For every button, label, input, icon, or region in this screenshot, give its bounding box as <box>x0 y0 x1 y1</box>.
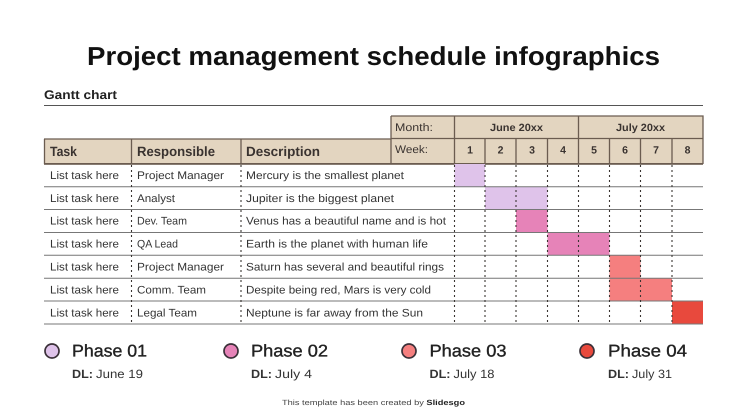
table header: Week: <box>395 144 428 156</box>
table header: 3 <box>529 144 535 156</box>
legend: phase 02 <box>224 342 328 381</box>
row 2 <box>50 193 394 205</box>
row 7: Neptune is far away from the Sun <box>246 308 423 320</box>
table header: July 20xx <box>616 122 665 134</box>
legend: phase 04: DL: <box>608 367 629 381</box>
row 4 <box>50 238 428 250</box>
icon: phase 04 marker <box>580 344 594 358</box>
legend: phase 04: July 31 <box>632 367 672 381</box>
legend: phase 02: DL: <box>251 367 272 381</box>
row 1: Mercury is the smallest planet <box>246 170 404 182</box>
row 4: List task here <box>50 238 119 250</box>
section heading: Gantt chart: Gantt chart <box>44 88 118 102</box>
table header <box>44 116 703 165</box>
legend: phase 01 <box>45 342 147 381</box>
gantt table <box>44 116 703 324</box>
row 2: Jupiter is the biggest planet <box>246 193 394 205</box>
row 5: Project Manager <box>137 262 224 274</box>
row 3: List task here <box>50 216 119 228</box>
row 5 <box>50 262 445 274</box>
legend: phase 01: Phase 01 <box>72 342 147 360</box>
icon: phase 01 marker <box>45 344 59 358</box>
legend: phase 02: Phase 02 <box>251 342 328 360</box>
legend: phase 01: DL: <box>72 367 93 381</box>
table header: Task <box>50 144 77 159</box>
row 4: Earth is the planet with human life <box>246 238 428 250</box>
row 7: Legal Team <box>137 308 197 320</box>
row 2: List task here <box>50 193 119 205</box>
row 3: Dev. Team <box>137 216 187 228</box>
title: Project management schedule infographics <box>87 41 660 71</box>
row 7 <box>50 308 423 320</box>
row 6: Comm. Team <box>137 284 206 296</box>
legend: phase 03: July 18 <box>454 367 495 381</box>
table header: 6 <box>622 144 628 156</box>
row 7: List task here <box>50 308 119 320</box>
row 6: Despite being red, Mars is very cold <box>246 284 431 296</box>
table header: Month: <box>395 122 433 134</box>
legend: phase 03: Phase 03 <box>430 342 506 360</box>
legend: phase 02: July 4 <box>275 367 312 381</box>
table header: Description <box>246 144 320 159</box>
row 1: Project Manager <box>137 170 224 182</box>
icon: phase 02 marker <box>224 344 238 358</box>
table header: 7 <box>653 144 659 156</box>
row 3 <box>50 216 446 228</box>
row 6 <box>50 284 431 296</box>
table header: 8 <box>685 144 691 156</box>
table header: 2 <box>498 144 504 156</box>
legend: phase 04: Phase 04 <box>608 342 687 360</box>
table header: 1 <box>467 144 473 156</box>
row 6: List task here <box>50 284 119 296</box>
row 1: List task here <box>50 170 119 182</box>
legend: phase 01: June 19 <box>96 367 143 381</box>
table header: 4 <box>560 144 566 156</box>
table header: Responsible <box>137 144 215 159</box>
row 1 <box>50 170 404 182</box>
row 5: List task here <box>50 262 119 274</box>
table header: 5 <box>591 144 597 156</box>
row 4: QA Lead <box>137 238 178 250</box>
row 3: Venus has a beautiful name and is hot <box>246 216 446 228</box>
schedule bars <box>454 164 703 324</box>
table header: June 20xx <box>490 122 543 134</box>
icon: phase 03 marker <box>402 344 416 358</box>
legend: phase 03: DL: <box>430 367 450 381</box>
legend: phase 04 <box>580 342 687 381</box>
legend: phase 03 <box>402 342 506 381</box>
row 5: Saturn has several and beautiful rings <box>246 262 445 274</box>
row 2: Analyst <box>137 193 175 205</box>
footer credit: This template has been created by Slidesgo <box>282 398 466 407</box>
